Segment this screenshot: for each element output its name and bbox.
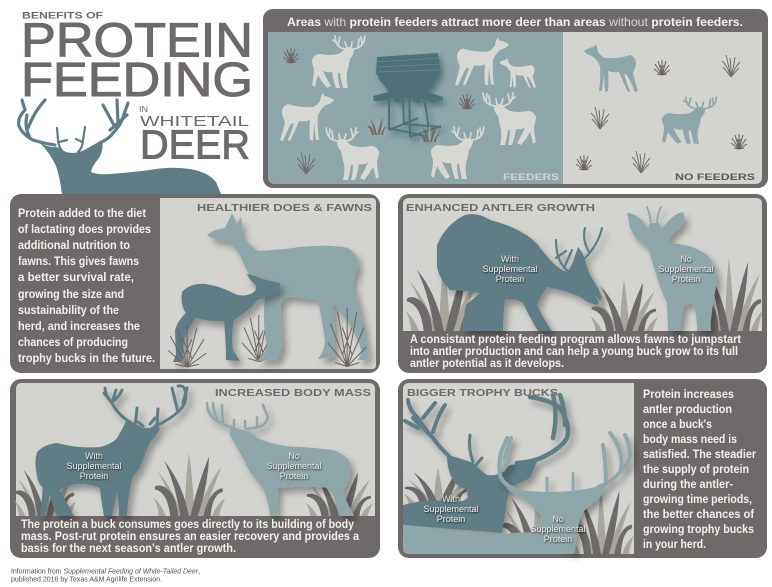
text block: Protein increases <box>643 387 734 401</box>
icon: tuft <box>576 155 592 170</box>
deer: big antler buck <box>403 395 568 533</box>
text block: mass. Post-rut protein ensures an easier recovery and provides a <box>21 529 359 543</box>
label: no supplemental protein: Supplemental <box>530 524 586 534</box>
label: with supplemental protein: Protein <box>437 514 465 524</box>
label: with supplemental protein: With <box>501 254 519 264</box>
text block: in your herd. <box>643 537 706 551</box>
grass behind right <box>568 487 634 554</box>
title block <box>21 10 253 168</box>
deer: feeder side doe 1 <box>280 93 334 141</box>
icon: grass tuft at feeder left <box>367 116 387 135</box>
label: no supplemental protein <box>266 451 322 481</box>
heading: protein: PROTEIN <box>21 14 253 68</box>
illustration background <box>16 383 375 516</box>
text block <box>18 206 155 365</box>
text block: fawns. This gives fawns <box>18 254 139 268</box>
text block: the better chances of <box>643 507 755 521</box>
text block: the supply of protein <box>643 462 749 476</box>
text block: into antler production and can help a young buck grow to its full <box>410 344 738 358</box>
no feeders area background <box>563 32 762 184</box>
source note: published 2016 by Texas A&M Agrilife Extension. <box>11 574 162 584</box>
label: with supplemental protein: With <box>85 451 103 461</box>
text block: antler production <box>643 402 732 416</box>
label: no supplemental protein: No <box>288 451 300 461</box>
label: with supplemental protein: Supplemental <box>66 461 122 471</box>
label: no supplemental protein: No <box>552 514 564 524</box>
deer: buck with supplement <box>36 386 187 516</box>
icon: fan grass <box>632 151 650 173</box>
deer: feeder side fawn <box>499 58 536 88</box>
icon: tuft <box>654 60 670 75</box>
icon: tuft <box>283 48 299 63</box>
icon: tuft <box>731 134 747 149</box>
grass right <box>695 258 763 331</box>
grass front left <box>168 325 206 367</box>
label: no supplemental protein: Protein <box>280 471 308 481</box>
deer: no feeder buck <box>662 97 717 144</box>
panel: increased body mass <box>10 379 380 558</box>
deer: buck without supplement <box>627 207 717 331</box>
illustration background <box>403 198 762 331</box>
grass left <box>14 463 76 516</box>
heading: ENHANCED ANTLER GROWTH <box>406 202 595 214</box>
text block: body mass need is <box>643 432 737 446</box>
deer: feeder side doe 2 <box>455 38 509 86</box>
icon: fan grass <box>297 152 315 174</box>
heading: feeders comparison: Areas with protein feeders attract more deer than areas without protein feeders. <box>287 15 743 29</box>
source note: Information from Supplemental Feeding of White-Tailed Deer, <box>11 566 200 576</box>
label: with supplemental protein <box>66 451 122 481</box>
label: no supplemental protein <box>530 514 586 544</box>
icon: fan grass <box>591 107 609 129</box>
heading: in: IN <box>139 104 148 114</box>
feeders area background <box>268 32 563 184</box>
heading: whitetail: WHITETAIL <box>140 114 249 130</box>
grass right <box>305 470 373 516</box>
deer: smaller antler buck <box>499 433 630 553</box>
text block: basis for the next season's antler growth. <box>21 541 236 555</box>
label: with supplemental protein: Protein <box>496 274 524 284</box>
deer: feeder side buck 4 <box>431 127 484 179</box>
deer: fawn <box>173 274 280 362</box>
text block: herd, and increases the <box>18 319 140 333</box>
deer: feeder side buck 1 <box>312 36 365 88</box>
icon: fan grass <box>722 55 740 77</box>
text block: growing the size and <box>18 287 124 301</box>
label: with supplemental protein: Supplemental <box>423 504 479 514</box>
panel: healthier does and fawns <box>10 194 380 373</box>
label: no feeders: NO FEEDERS <box>675 172 755 183</box>
label: with supplemental protein: Protein <box>80 471 108 481</box>
grass left <box>405 261 483 331</box>
heading: deer: DEER <box>140 122 250 168</box>
text block: of lactating does provides <box>18 222 151 236</box>
heading: BIGGER TROPHY BUCKS <box>407 387 558 399</box>
label: with supplemental protein: With <box>442 494 460 504</box>
label: no supplemental protein <box>658 254 714 284</box>
grass front right <box>328 308 366 366</box>
label: no supplemental protein: Protein <box>544 534 572 544</box>
heading: HEALTHIER DOES & FAWNS <box>197 202 372 214</box>
text block <box>410 332 741 370</box>
label: feeders: FEEDERS <box>503 172 559 183</box>
text block: trophy bucks in the future. <box>18 351 155 365</box>
icon: resting buck silhouette <box>19 100 221 194</box>
deer: buck without supplement <box>207 403 354 516</box>
grass behind does <box>242 315 276 362</box>
text block: Protein added to the diet <box>18 206 146 220</box>
text block: once a buck's <box>643 417 712 431</box>
foreground mound <box>403 525 572 554</box>
icon: protein feeder <box>373 53 443 137</box>
text block: satisfied. The steadier <box>643 447 756 461</box>
text block <box>21 517 359 555</box>
illustration background <box>160 198 376 369</box>
label: with supplemental protein <box>423 494 479 524</box>
deer: feeder side buck 3 <box>483 93 536 145</box>
grass behind left <box>403 468 473 504</box>
panel: feeders comparison <box>263 9 768 188</box>
illustration background <box>403 383 634 554</box>
panel: enhanced antler growth <box>398 194 767 373</box>
deer: buck with supplement grazing <box>437 214 602 331</box>
label: no supplemental protein: Supplemental <box>266 461 322 471</box>
text block: growing time periods, <box>643 492 752 506</box>
label: no supplemental protein: No <box>680 254 692 264</box>
text block: during the antler- <box>643 477 733 491</box>
grass middle <box>590 280 658 331</box>
icon: grass tuft at feeder right <box>419 124 440 142</box>
deer: doe <box>207 213 368 361</box>
deer: feeder side buck 2 <box>326 128 379 180</box>
label: no supplemental protein: Protein <box>672 274 700 284</box>
text block: A consistant protein feeding program allows fawns to jumpstart <box>410 332 741 346</box>
text block: antler potential as it develops. <box>410 356 564 370</box>
label: with supplemental protein <box>482 254 538 284</box>
panel: bigger trophy bucks <box>398 379 767 558</box>
text block: The protein a buck consumes goes directly to its building of body <box>21 517 354 531</box>
text block: additional nutrition to <box>18 238 130 252</box>
grass middle <box>153 453 225 516</box>
text block: growing trophy bucks <box>643 522 754 536</box>
grass behind middle <box>500 490 575 554</box>
heading: INCREASED BODY MASS <box>215 387 371 399</box>
heading: feeding: FEEDING <box>21 54 253 107</box>
text block <box>643 387 756 551</box>
label: no supplemental protein: Supplemental <box>658 264 714 274</box>
text block: chances of producing <box>18 335 128 349</box>
icon: tuft <box>459 94 475 109</box>
label: with supplemental protein: Supplemental <box>482 264 538 274</box>
text block: sustainability of the <box>18 303 119 317</box>
heading: benefits of: BENEFITS OF <box>22 10 104 20</box>
source note <box>11 566 200 584</box>
deer: no feeder doe <box>584 44 638 92</box>
text block: a better survival rate, <box>18 270 134 284</box>
